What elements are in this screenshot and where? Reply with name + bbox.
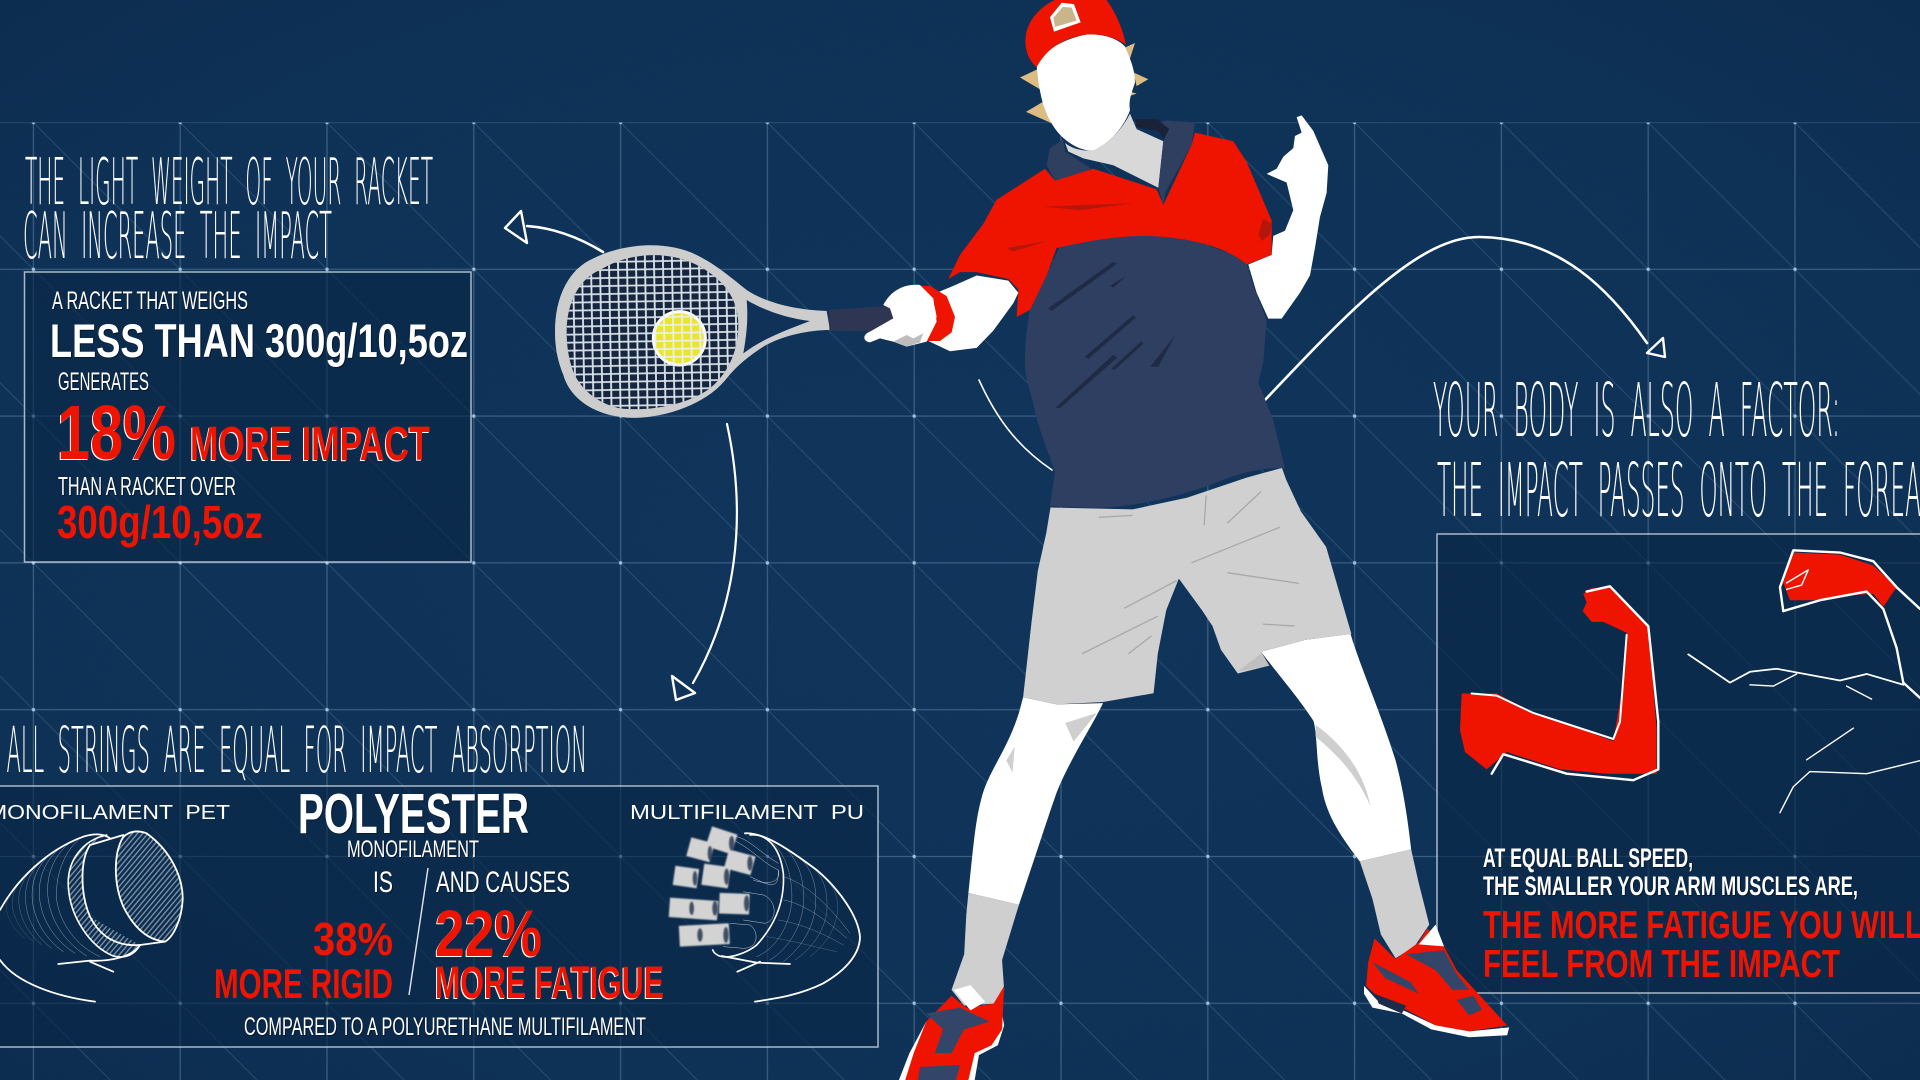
- text: and causes: AND CAUSES: [436, 866, 570, 899]
- text: monofilament: MONOFILAMENT: [347, 836, 479, 863]
- panel: racket weight: [23, 146, 471, 562]
- face: [1037, 34, 1135, 151]
- text: is: IS: [373, 866, 393, 899]
- panel: body factor: [1433, 368, 1920, 993]
- illustration: racket: [555, 245, 897, 418]
- arrow: racket to weight heading: [505, 211, 603, 252]
- neck: [1065, 114, 1163, 188]
- text: CAN INCREASE THE IMPACT: [23, 200, 332, 274]
- left arm: [928, 276, 1018, 351]
- panel: strings: [0, 714, 878, 1047]
- text: compared to polyurethane: COMPARED TO A POLYURETHANE MULTIFILAMENT: [244, 1013, 646, 1041]
- stat label: more rigid: MORE RIGID: [214, 960, 393, 1007]
- panel border: [0, 786, 878, 1047]
- text: at equal ball speed: AT EQUAL BALL SPEED,: [1483, 843, 1693, 873]
- icon: large arm: [1688, 550, 1920, 813]
- hand: [864, 285, 937, 347]
- panel border: [24, 272, 471, 562]
- racket handle: [829, 306, 897, 331]
- stat label: more fatigue: MORE FATIGUE: [435, 957, 664, 1008]
- shirt shoulders: [948, 133, 1272, 317]
- text: THE LIGHT WEIGHT OF YOUR RACKET: [25, 146, 433, 220]
- stat: 18 percent: 18%: [57, 390, 176, 476]
- cap: [1025, 0, 1126, 67]
- panel background: [0, 786, 878, 1047]
- stat: 22 percent: 22%: [435, 896, 542, 970]
- racket strings: [566, 255, 738, 410]
- racket frame: [555, 245, 830, 418]
- shirt body: [1025, 235, 1285, 508]
- right shoe: [1364, 925, 1509, 1037]
- stat label: more impact: MORE IMPACT: [190, 418, 430, 471]
- player torso and head: [918, 0, 1328, 508]
- panel background: [1437, 534, 1920, 993]
- racket throat opening: [743, 300, 810, 353]
- arrow: small arc behind player: [979, 380, 1052, 470]
- heading: racket weight: [23, 146, 433, 274]
- text: a racket that weighs: A RACKET THAT WEIGHS: [52, 287, 248, 315]
- hair: [1020, 43, 1148, 123]
- heading: body factor: [1433, 368, 1920, 534]
- stat: 300g: 300g/10,5oz: [57, 496, 263, 548]
- stat: 38 percent: 38%: [313, 913, 393, 965]
- callout: more fatigue: [1483, 904, 1920, 986]
- text: than a racket over: THAN A RACKET OVER: [58, 471, 236, 501]
- panel border: [1437, 534, 1920, 993]
- text: less than 300g: LESS THAN 300g/10,5oz: [50, 314, 468, 367]
- panel background: [24, 272, 471, 562]
- arrow: racket to strings: [672, 424, 737, 700]
- left shoe: [899, 985, 1004, 1080]
- arrow: body to forearm: [1265, 237, 1665, 400]
- illustration: tennis player: [864, 0, 1509, 1080]
- racket head: [567, 255, 738, 409]
- icon: monofilament string: [0, 831, 183, 1002]
- player legs: [899, 468, 1509, 1080]
- right arm: [1248, 115, 1328, 319]
- wristband: [918, 286, 955, 341]
- text: generates: GENERATES: [58, 368, 149, 396]
- title: polyester: POLYESTER: [298, 782, 529, 846]
- text: NOT ALL STRINGS ARE EQUAL FOR IMPACT ABSORPTION: [0, 714, 587, 787]
- icon: multifilament string: [669, 826, 860, 1002]
- icon: small arm: [1460, 586, 1658, 780]
- tennis ball: [653, 312, 705, 365]
- label: multifilament pu: MULTIFILAMENT PU: [630, 802, 864, 824]
